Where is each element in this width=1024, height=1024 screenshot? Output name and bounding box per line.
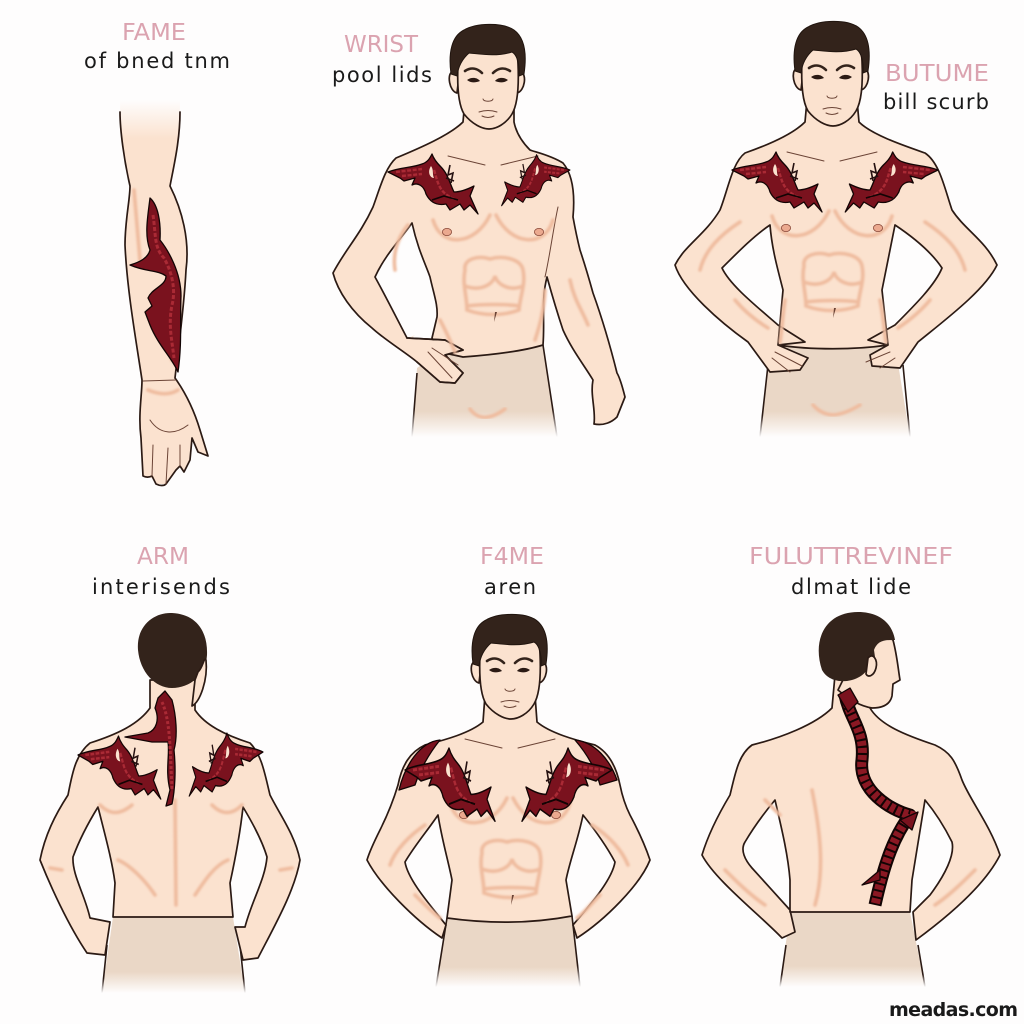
tattoo: left shoulder blade dragon bbox=[78, 736, 161, 799]
tattoo: neck and spine dragon bbox=[125, 691, 176, 806]
caption: front shoulders: aren bbox=[484, 575, 536, 599]
panel: spine back view bbox=[702, 544, 1000, 987]
tattoo: spine dragon bbox=[838, 688, 918, 905]
illustration: male figure hands on hips bbox=[675, 21, 997, 437]
heading: shoulders: BUTUME bbox=[885, 61, 989, 87]
panel: forearm bbox=[84, 20, 230, 486]
illustration: male figure front bbox=[333, 24, 625, 437]
heading: chest: WRIST bbox=[344, 32, 419, 58]
caption: forearm: of bned tnm bbox=[84, 49, 230, 73]
tattoo: right chest dragon bbox=[502, 155, 570, 206]
caption: chest: pool lids bbox=[332, 63, 432, 87]
tattoo: right winged dragon bbox=[522, 740, 617, 821]
illustration: male figure from behind bbox=[40, 613, 300, 993]
tattoo: right shoulder dragon bbox=[845, 152, 938, 212]
tattoo: left shoulder dragon bbox=[732, 152, 822, 212]
panel: chest hands on hips bbox=[675, 21, 997, 437]
heading: front shoulders: F4ME bbox=[480, 544, 544, 570]
panel: shoulders winged bbox=[367, 544, 650, 987]
illustration: forearm and hand bbox=[120, 100, 208, 486]
illustration: male figure front arms bent bbox=[367, 614, 650, 987]
illustration: male figure from behind three-quarter bbox=[702, 612, 1000, 987]
tattoo: left winged dragon bbox=[399, 740, 495, 821]
panel: chest one hand on hip bbox=[332, 24, 625, 437]
heading: spine: FULUTTREVINEF bbox=[749, 544, 953, 570]
heading: forearm: FAME bbox=[122, 20, 186, 46]
watermark: meadas.com bbox=[889, 999, 1018, 1021]
caption: spine: dlmat lide bbox=[791, 575, 911, 599]
tattoo: left chest dragon bbox=[388, 154, 478, 214]
panel: upper back bbox=[40, 544, 300, 993]
tattoo: right shoulder blade dragon bbox=[189, 733, 263, 796]
caption: upper back: interisends bbox=[92, 575, 230, 599]
heading: upper back: ARM bbox=[137, 544, 189, 570]
caption: shoulders: bill scurb bbox=[883, 90, 989, 114]
tattoo: forearm dragon bbox=[130, 198, 181, 372]
